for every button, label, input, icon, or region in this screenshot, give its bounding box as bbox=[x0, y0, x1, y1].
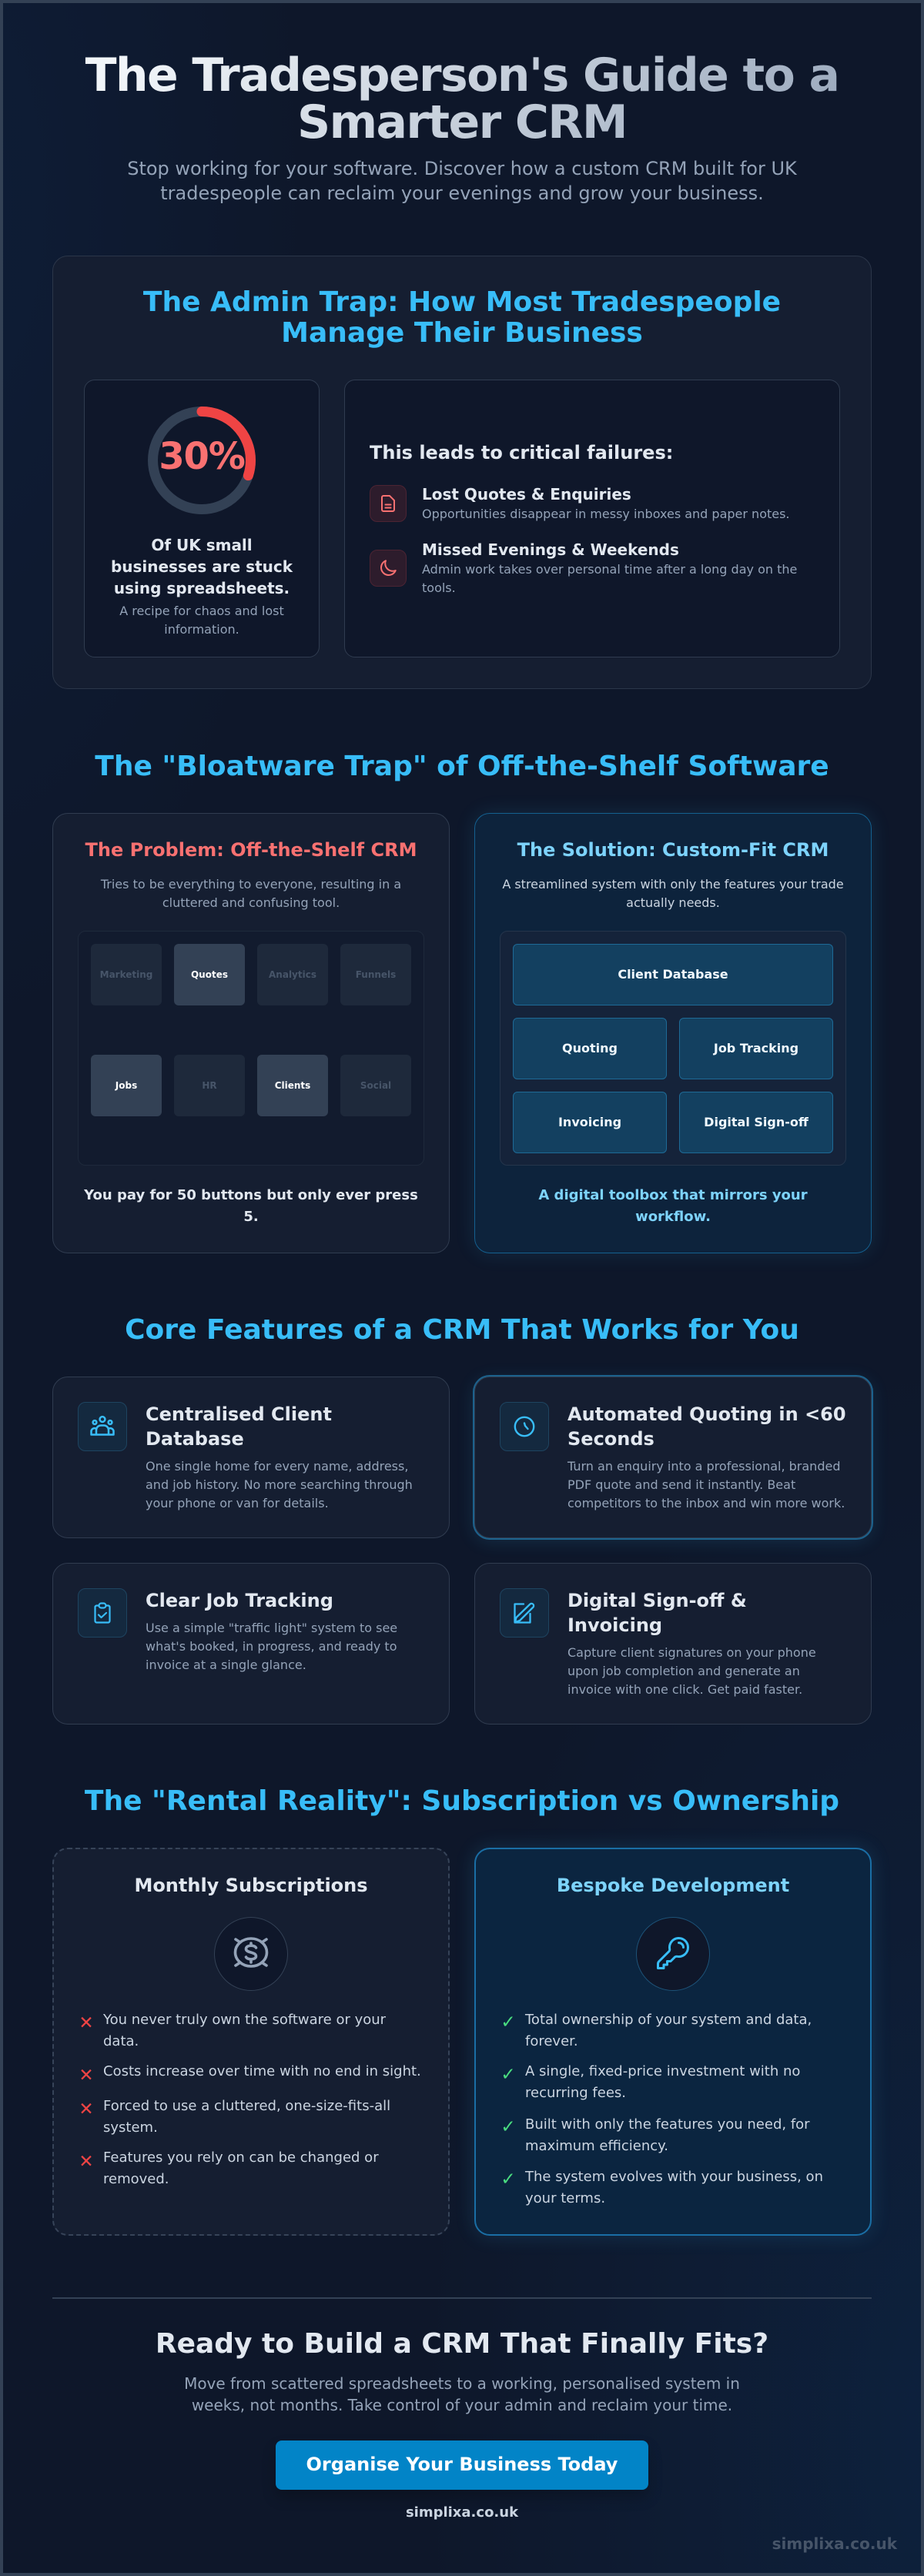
panel: problem bbox=[52, 813, 450, 1253]
list item: Forced to use a cluttered, one-size-fits-all bbox=[103, 2098, 390, 2114]
problem conclusion: 5. bbox=[243, 1209, 259, 1225]
list item: data. bbox=[103, 2033, 139, 2049]
tile bbox=[174, 944, 245, 1005]
list item: You never truly own the software or your bbox=[103, 2012, 386, 2028]
problem text: cluttered and confusing tool. bbox=[162, 895, 340, 910]
list item: system. bbox=[103, 2119, 158, 2136]
icon: moon bbox=[370, 550, 407, 587]
feature title: Digital Sign-off & bbox=[567, 1590, 747, 1611]
tile: Jobs bbox=[116, 1080, 137, 1091]
failure title: Lost Quotes & Enquiries bbox=[422, 485, 631, 503]
failure text: Opportunities disappear in messy inboxes and paper notes. bbox=[422, 507, 790, 520]
failure: missed evenings bbox=[422, 540, 797, 595]
website: simplixa.co.uk bbox=[406, 2504, 518, 2521]
failures heading: This leads to critical failures: bbox=[370, 442, 673, 463]
list item: Features you rely on can be changed or bbox=[103, 2149, 379, 2166]
failure text bbox=[422, 562, 797, 595]
problem text bbox=[100, 877, 401, 910]
tile: Clients bbox=[275, 1080, 310, 1091]
feature title: Database bbox=[146, 1428, 244, 1450]
solution conclusion bbox=[538, 1187, 808, 1225]
stat number: 30% bbox=[159, 435, 245, 478]
list item bbox=[103, 2149, 379, 2187]
solution text: A streamlined system with only the features your trade bbox=[502, 877, 844, 892]
feature title bbox=[567, 1403, 846, 1450]
failure: lost quotes bbox=[422, 485, 790, 520]
bespoke heading: Bespoke Development bbox=[557, 1875, 789, 1896]
tile: Social bbox=[360, 1080, 391, 1091]
feature title: Centralised Client bbox=[146, 1403, 332, 1425]
list item bbox=[103, 2012, 386, 2049]
feature text: Use a simple "traffic light" system to see bbox=[146, 1621, 397, 1635]
panel: monthly subscriptions bbox=[52, 1848, 450, 2236]
panel: 30 percent stat bbox=[84, 380, 320, 657]
problem conclusion bbox=[84, 1187, 418, 1225]
failure text: Admin work takes over personal time after a long day on the bbox=[422, 562, 797, 577]
tile bbox=[340, 944, 411, 1005]
feature text: competitors to the inbox and win more work. bbox=[567, 1496, 845, 1510]
heading: admin trap bbox=[143, 286, 781, 349]
cluttered feature mock bbox=[78, 931, 424, 1166]
tile: Client Database bbox=[618, 967, 728, 982]
tile: Invoicing bbox=[558, 1115, 621, 1129]
list item: removed. bbox=[103, 2171, 169, 2187]
cta heading: Ready to Build a CRM That Finally Fits? bbox=[156, 2328, 768, 2360]
list item: Costs increase over time with no end in sight. bbox=[103, 2063, 421, 2079]
cta text bbox=[184, 2374, 740, 2414]
solution text: actually needs. bbox=[626, 895, 720, 910]
cta button: Organise Your Business Today bbox=[306, 2454, 618, 2475]
stat caption: using spreadsheets. bbox=[114, 579, 290, 597]
stat note: A recipe for chaos and lost bbox=[119, 604, 284, 618]
feature title bbox=[146, 1403, 332, 1450]
feature title: Automated Quoting in <60 bbox=[567, 1403, 846, 1425]
feature title: Seconds bbox=[567, 1428, 654, 1450]
check mark: ✓ bbox=[500, 2170, 516, 2190]
subtitle: tradespeople can reclaim your evenings and grow your business. bbox=[160, 182, 764, 204]
feature title: Invoicing bbox=[567, 1614, 662, 1636]
list item: Built with only the features you need, for bbox=[525, 2116, 810, 2133]
icon: people bbox=[78, 1402, 127, 1451]
list item: maximum efficiency. bbox=[525, 2138, 668, 2154]
panel: admin trap bbox=[52, 256, 872, 689]
tile: Quotes bbox=[191, 969, 228, 980]
list: subscription downsides bbox=[79, 2012, 421, 2187]
list item: A single, fixed-price investment with no bbox=[525, 2063, 800, 2079]
feature text: One single home for every name, address, bbox=[146, 1459, 408, 1474]
subtitle: Stop working for your software. Discover how a custom CRM built for UK bbox=[127, 158, 797, 179]
solution heading: The Solution: Custom-Fit CRM bbox=[517, 839, 829, 861]
icon: document bbox=[370, 485, 407, 522]
tile bbox=[91, 944, 162, 1005]
feature text: Turn an enquiry into a professional, branded bbox=[567, 1459, 840, 1474]
list item: forever. bbox=[525, 2033, 578, 2049]
cross mark: ✕ bbox=[79, 2066, 94, 2086]
solution text bbox=[502, 877, 844, 910]
list item bbox=[525, 2012, 812, 2049]
icon: pencil square bbox=[500, 1588, 549, 1638]
feature text: PDF quote and send it instantly. Beat bbox=[567, 1477, 795, 1492]
tile: Job Tracking bbox=[714, 1041, 798, 1055]
stat caption: Of UK small bbox=[151, 536, 253, 554]
heading: admin trap: The Admin Trap: How Most Tradespeople bbox=[143, 286, 781, 318]
feature text: Capture client signatures on your phone bbox=[567, 1645, 816, 1660]
icon: recurring dollar bbox=[214, 1917, 288, 1991]
subtitle bbox=[127, 158, 798, 204]
check mark: ✓ bbox=[500, 2117, 516, 2137]
problem text: Tries to be everything to everyone, resulting in a bbox=[101, 877, 401, 892]
check mark: ✓ bbox=[500, 2065, 516, 2085]
feature text: what's booked, in progress, and ready to bbox=[146, 1639, 397, 1654]
stat caption bbox=[111, 536, 293, 597]
cross mark: ✕ bbox=[79, 2152, 94, 2172]
list item: your terms. bbox=[525, 2190, 605, 2206]
tile: HR bbox=[202, 1080, 217, 1091]
list item: The system evolves with your business, on bbox=[525, 2169, 823, 2185]
cross mark: ✕ bbox=[79, 2099, 94, 2119]
tile bbox=[679, 1018, 833, 1079]
panel: critical failures bbox=[344, 380, 840, 657]
stat note bbox=[119, 604, 284, 637]
feature card: client database bbox=[52, 1377, 450, 1538]
tile bbox=[513, 1018, 667, 1079]
stat caption: businesses are stuck bbox=[111, 557, 293, 576]
subscriptions heading: Monthly Subscriptions bbox=[134, 1875, 368, 1896]
heading: core features: Core Features of a CRM That Works for You bbox=[125, 1314, 799, 1346]
panel: solution bbox=[474, 813, 872, 1253]
feature text: and job history. No more searching through bbox=[146, 1477, 413, 1492]
tile bbox=[679, 1092, 833, 1153]
panel: bespoke development bbox=[474, 1848, 872, 2236]
title: Smarter CRM bbox=[297, 95, 627, 149]
feature card: digital sign-off bbox=[474, 1563, 872, 1725]
icon: clock bbox=[500, 1402, 549, 1451]
icon: clipboard check bbox=[78, 1588, 127, 1638]
list: bespoke benefits bbox=[500, 2012, 823, 2206]
heading: admin trap: Manage Their Business bbox=[281, 317, 643, 349]
feature text: invoice with one click. Get paid faster. bbox=[567, 1682, 802, 1697]
tile: Analytics bbox=[269, 969, 316, 980]
cta text: Move from scattered spreadsheets to a working, personalised system in bbox=[184, 2374, 740, 2393]
problem conclusion: You pay for 50 buttons but only ever press bbox=[84, 1187, 418, 1203]
feature text bbox=[146, 1621, 397, 1672]
feature text: upon job completion and generate an bbox=[567, 1664, 800, 1678]
feature text bbox=[146, 1459, 413, 1510]
feature text: your phone or van for details. bbox=[146, 1496, 329, 1510]
list item: recurring fees. bbox=[525, 2085, 626, 2101]
watermark: simplixa.co.uk bbox=[772, 2534, 897, 2553]
tile: Marketing bbox=[100, 969, 152, 980]
tile bbox=[513, 1092, 667, 1153]
tile bbox=[257, 1055, 328, 1116]
list item bbox=[525, 2169, 823, 2206]
failure text: tools. bbox=[422, 580, 456, 595]
custom feature mock bbox=[500, 931, 846, 1166]
check mark: ✓ bbox=[500, 2012, 516, 2032]
list item bbox=[525, 2116, 810, 2154]
tile bbox=[257, 944, 328, 1005]
failure title: Missed Evenings & Weekends bbox=[422, 540, 679, 559]
tile: Digital Sign-off bbox=[704, 1115, 808, 1129]
stat note: information. bbox=[164, 622, 239, 637]
donut chart: 30 percent bbox=[148, 406, 256, 514]
feature card: automated quoting bbox=[474, 1377, 872, 1538]
heading: bloatware trap: The "Bloatware Trap" of Off-the-Shelf Software bbox=[95, 751, 829, 782]
cta text: weeks, not months. Take control of your admin and reclaim your time. bbox=[192, 2396, 732, 2414]
list item: Total ownership of your system and data, bbox=[525, 2012, 812, 2028]
tile: Funnels bbox=[356, 969, 396, 980]
tile bbox=[340, 1055, 411, 1116]
heading: rental reality: The "Rental Reality": Subscription vs Ownership bbox=[85, 1785, 839, 1817]
cross mark: ✕ bbox=[79, 2013, 94, 2033]
feature text bbox=[567, 1459, 845, 1510]
tile bbox=[513, 944, 833, 1005]
feature text: invoice at a single glance. bbox=[146, 1658, 306, 1672]
solution conclusion: workflow. bbox=[635, 1209, 711, 1225]
feature title bbox=[567, 1590, 747, 1636]
feature title: Clear Job Tracking bbox=[146, 1590, 333, 1611]
feature card: job tracking bbox=[52, 1563, 450, 1725]
tile bbox=[174, 1055, 245, 1116]
title bbox=[52, 52, 872, 146]
list item bbox=[525, 2063, 800, 2101]
feature text bbox=[567, 1645, 816, 1697]
problem heading: The Problem: Off-the-Shelf CRM bbox=[85, 839, 417, 861]
tile bbox=[91, 1055, 162, 1116]
solution conclusion: A digital toolbox that mirrors your bbox=[538, 1187, 808, 1203]
list item bbox=[103, 2098, 390, 2136]
tile: Quoting bbox=[562, 1041, 618, 1055]
icon: key bbox=[636, 1917, 710, 1991]
cta button bbox=[276, 2441, 648, 2490]
title: The Tradesperson's Guide to a bbox=[85, 49, 839, 102]
